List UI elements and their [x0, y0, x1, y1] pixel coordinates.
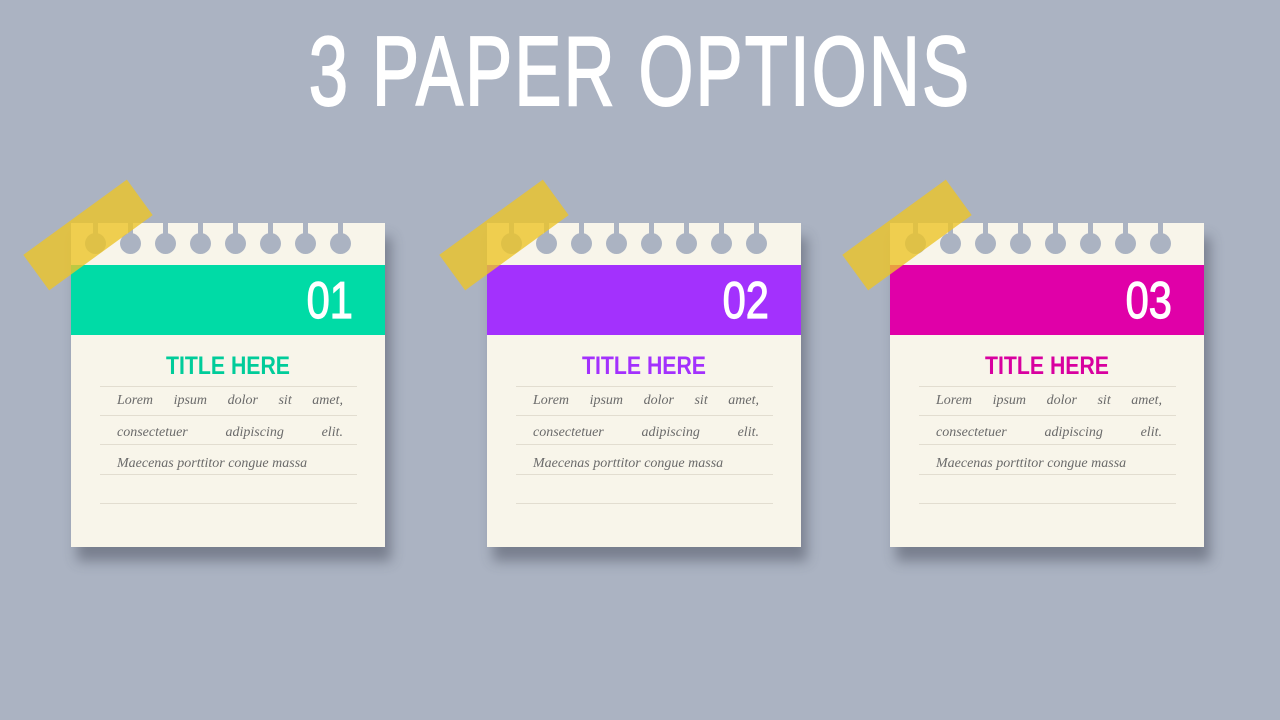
body text: Maecenas porttitor congue massa — [117, 456, 307, 471]
number band: 02 — [723, 272, 769, 330]
body text: sit — [278, 393, 292, 408]
body text: amet, — [312, 393, 343, 408]
body text: elit. — [1141, 425, 1162, 440]
body text — [516, 386, 773, 504]
tape 2 — [439, 180, 569, 290]
body text: elit. — [738, 425, 759, 440]
tape 1 — [23, 180, 153, 290]
number band: 03 — [1126, 272, 1172, 330]
body text: Lorem — [117, 393, 153, 408]
card title: TITLE HERE — [166, 352, 290, 380]
number band — [71, 265, 385, 335]
panel: card 2 — [487, 223, 801, 547]
body text: elit. — [322, 425, 343, 440]
body text: Maecenas porttitor congue massa — [533, 456, 723, 471]
body text: consectetuer — [533, 425, 604, 440]
body text: consectetuer — [936, 425, 1007, 440]
body text: ipsum — [174, 393, 207, 408]
panel: card 3 — [890, 223, 1204, 547]
tape 3 — [842, 180, 972, 290]
body text: adipiscing — [226, 425, 284, 440]
number band — [890, 265, 1204, 335]
holes — [85, 223, 351, 254]
card title: TITLE HERE — [985, 352, 1109, 380]
number band: 01 — [307, 272, 353, 330]
body text: ipsum — [993, 393, 1026, 408]
body text: dolor — [1047, 393, 1077, 408]
body text: ipsum — [590, 393, 623, 408]
holes — [905, 223, 1171, 254]
body text: Maecenas porttitor congue massa — [936, 456, 1126, 471]
card title: TITLE HERE — [582, 352, 706, 380]
body text: adipiscing — [642, 425, 700, 440]
body text: sit — [1097, 393, 1111, 408]
body text — [100, 386, 357, 504]
body text: dolor — [228, 393, 258, 408]
body text: Lorem — [936, 393, 972, 408]
holes — [501, 223, 767, 254]
body text: adipiscing — [1044, 425, 1103, 440]
body text: consectetuer — [117, 425, 188, 440]
number band — [487, 265, 801, 335]
body text: amet, — [1131, 393, 1162, 408]
body text: dolor — [644, 393, 674, 408]
panel: card 1 — [71, 223, 385, 547]
body text: sit — [694, 393, 708, 408]
body text: Lorem — [533, 393, 569, 408]
title: 3 PAPER OPTIONS — [309, 16, 971, 126]
body text: amet, — [728, 393, 759, 408]
body text — [919, 386, 1176, 504]
